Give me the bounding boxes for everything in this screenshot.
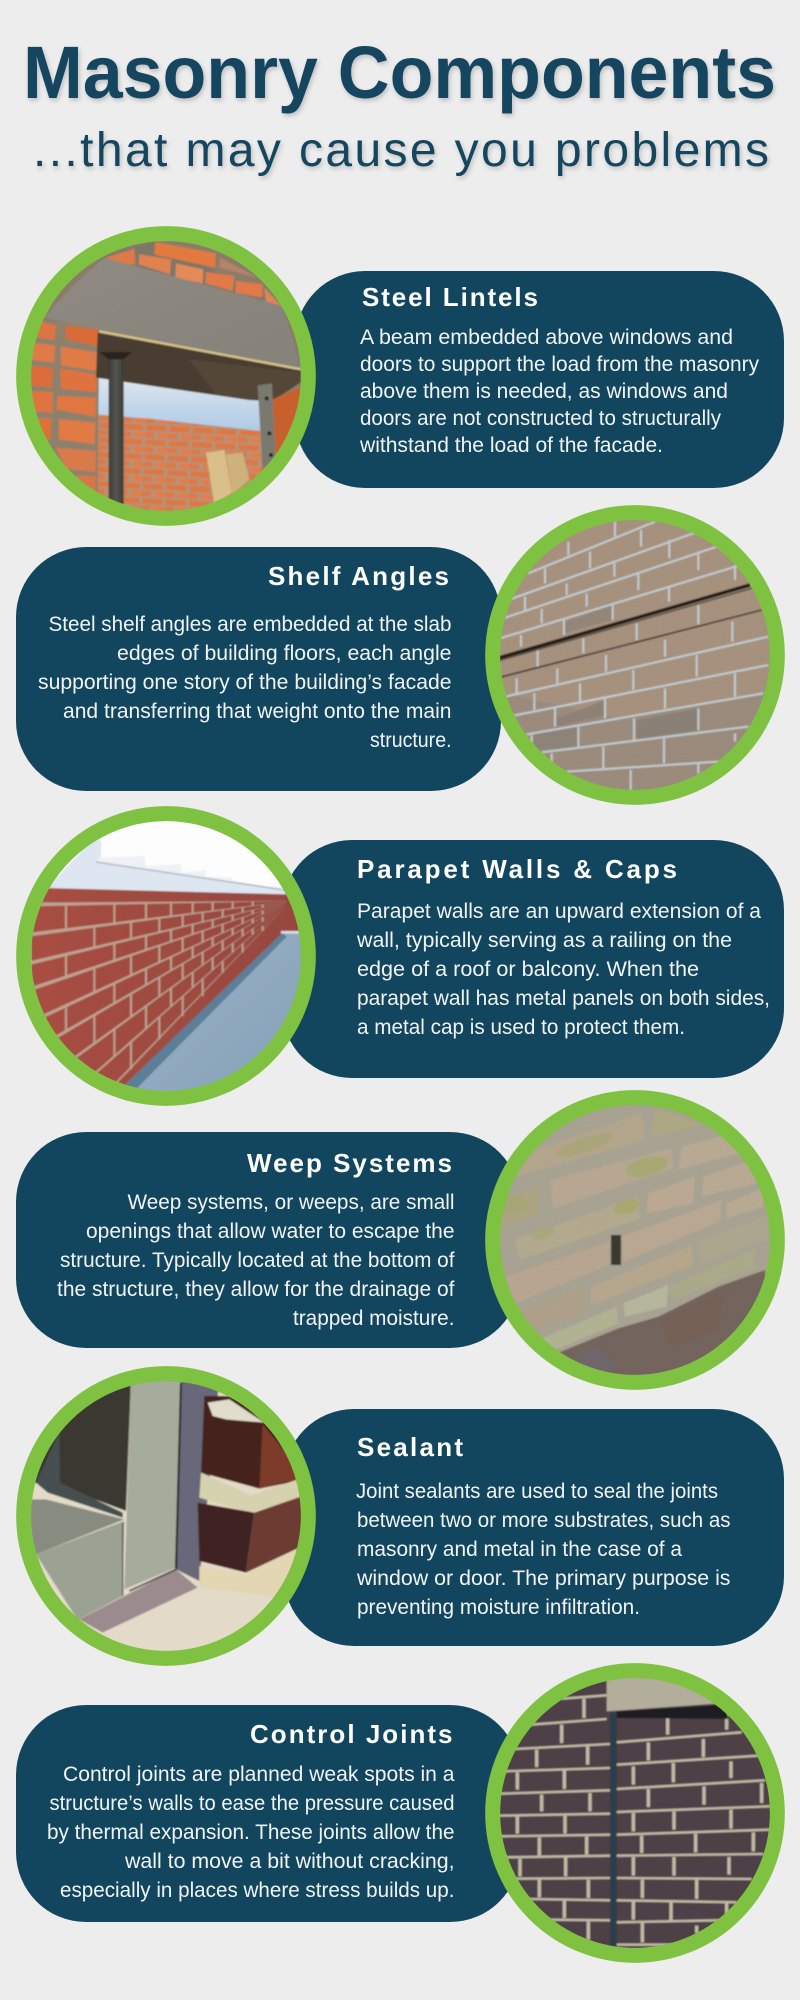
panel: Steel Lintels [295, 271, 784, 488]
body text [356, 900, 770, 1039]
body text [57, 1191, 455, 1330]
body text: structure’s walls to ease the pressure caused [50, 1792, 454, 1815]
body text [359, 326, 759, 457]
heading: Steel Lintels [362, 282, 538, 312]
body text: masonry and metal in the case of a [357, 1538, 682, 1561]
body text: especially in places where stress builds up. [60, 1879, 454, 1902]
photo ring [493, 1098, 777, 1382]
heading: Control Joints [250, 1719, 452, 1749]
body text: and transferring that weight onto the main [63, 700, 452, 723]
body text: the structure, they allow for the drainage of [57, 1278, 455, 1301]
panel background [16, 1132, 520, 1348]
heading: Parapet Walls & Caps [357, 854, 677, 884]
body text: withstand the load of the facade. [359, 434, 663, 457]
photo ring [493, 513, 777, 797]
body text: Steel shelf angles are embedded at the slab [48, 613, 452, 636]
photo: shelf angle in brick wall [485, 505, 785, 805]
panel: Weep Systems [16, 1132, 520, 1348]
body text: edges of building floors, each angle [117, 642, 452, 665]
body text: Joint sealants are used to seal the joints [356, 1480, 718, 1503]
subtitle: ...that may cause you problems [33, 124, 769, 177]
photo ring [493, 1671, 777, 1955]
photo: steel lintel over opening [16, 226, 316, 526]
panel background [282, 840, 784, 1078]
body text: doors to support the load from the masonry [360, 353, 759, 376]
body text: doors are not constructed to structurally [360, 407, 721, 430]
body text: parapet wall has metal panels on both sides, [357, 987, 770, 1010]
heading: Shelf Angles [268, 561, 449, 591]
title: Masonry Components [23, 31, 776, 114]
body text: structure. [370, 729, 452, 752]
photo ring [24, 234, 308, 518]
body text: by thermal expansion. These joints allow the [47, 1821, 454, 1844]
panel background [16, 547, 501, 791]
heading: Sealant [357, 1432, 463, 1462]
photo: control joint in dark brick [485, 1663, 785, 1963]
body text: trapped moisture. [293, 1307, 454, 1330]
body text [47, 1763, 455, 1902]
photo: sealant at window and brick [16, 1366, 316, 1666]
body text: above them is needed, as windows and [360, 380, 728, 403]
body text: wall, typically serving as a railing on the [356, 929, 732, 952]
body text: supporting one story of the building’s facade [38, 671, 452, 694]
panel: Sealant [284, 1409, 784, 1646]
photo ring [24, 1374, 308, 1658]
body text: between two or more substrates, such as [357, 1509, 730, 1532]
body text: A beam embedded above windows and [360, 326, 733, 349]
panel background [295, 271, 784, 488]
panel: Shelf Angles [16, 547, 501, 791]
body text: structure. Typically located at the bottom of [60, 1249, 455, 1272]
body text [38, 613, 452, 752]
panel background [284, 1409, 784, 1646]
body text: Weep systems, or weeps, are small [128, 1191, 454, 1214]
body text: Control joints are planned weak spots in a [63, 1763, 455, 1786]
photo ring [24, 814, 308, 1098]
photo: weep hole in brick [485, 1090, 785, 1390]
body text: wall to move a bit without cracking, [124, 1850, 455, 1873]
body text: window or door. The primary purpose is [356, 1567, 730, 1590]
body text: a metal cap is used to protect them. [357, 1016, 685, 1039]
body text [356, 1480, 730, 1619]
body text: Parapet walls are an upward extension of a [357, 900, 761, 923]
body text: edge of a roof or balcony. When the [357, 958, 699, 981]
body text: openings that allow water to escape the [86, 1220, 454, 1243]
photo: parapet wall with metal cap [16, 806, 316, 1106]
body text: preventing moisture infiltration. [357, 1596, 640, 1619]
panel: Parapet Walls & Caps [282, 840, 784, 1078]
panel: Control Joints [16, 1705, 520, 1922]
heading: Weep Systems [247, 1148, 452, 1178]
panel background [16, 1705, 520, 1922]
